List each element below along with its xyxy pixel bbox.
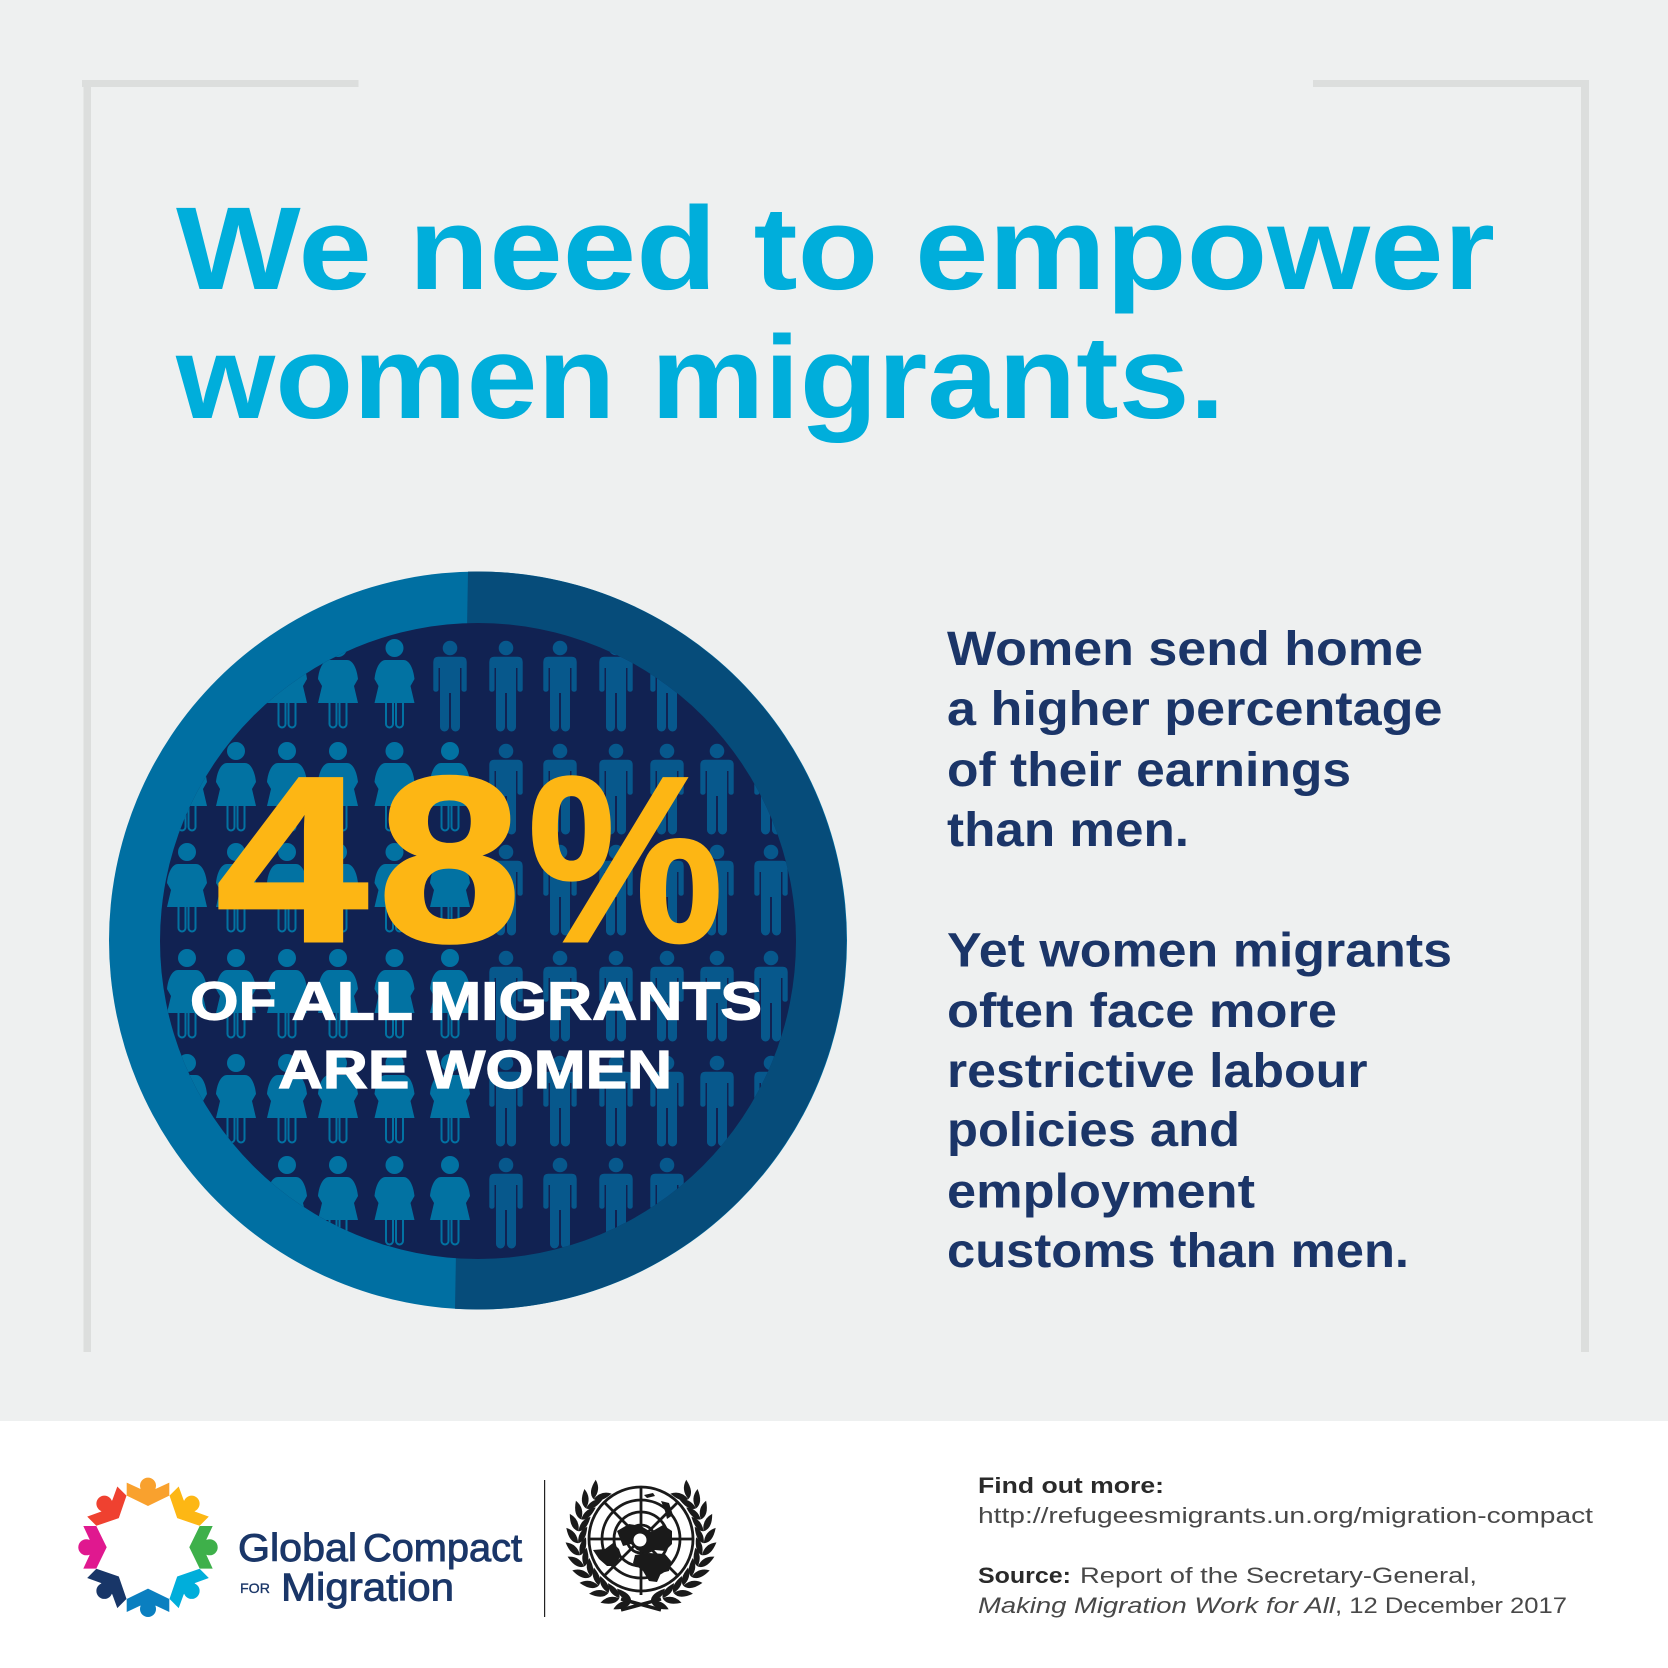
footer text: source	[978, 1563, 1567, 1618]
text block: remittances: of their earnings	[947, 744, 1351, 797]
footer text: source: , 12 December 2017	[1335, 1593, 1567, 1618]
title	[175, 183, 1495, 444]
stat caption	[190, 972, 762, 1100]
logo wordmark: Migration	[281, 1566, 454, 1610]
title: We need to empower	[176, 183, 1495, 315]
big number: %	[528, 728, 723, 992]
icon: United Nations emblem	[566, 1480, 716, 1612]
text block: restrictions	[947, 924, 1452, 1278]
text block: remittances: a higher percentage	[947, 683, 1442, 736]
text block: remittances	[947, 623, 1442, 857]
text block: restrictions: often face more	[947, 985, 1337, 1038]
logo: Global Compact ring of people	[78, 1478, 218, 1617]
logo wordmark: FOR	[240, 1580, 270, 1596]
big number: 4	[216, 728, 368, 992]
big number: 8	[378, 728, 521, 992]
ring: women share	[109, 572, 847, 1310]
footer text: source: Report of the Secretary-General,	[1080, 1563, 1477, 1588]
title: women migrants.	[175, 312, 1225, 444]
inner disc	[160, 623, 796, 1259]
logo wordmark: Compact	[363, 1527, 522, 1570]
logo wordmark: Global	[238, 1527, 357, 1570]
logo divider	[544, 1480, 545, 1617]
stat caption: OF ALL MIGRANTS	[190, 972, 762, 1032]
text block: restrictions: policies and	[947, 1104, 1240, 1157]
stat caption: ARE WOMEN	[278, 1040, 672, 1100]
footer band	[0, 1421, 1668, 1668]
text block: restrictions: employment	[947, 1166, 1255, 1218]
footer text: find out more: http://refugeesmigrants.un.org/migration-compact	[978, 1503, 1594, 1528]
text block: remittances: Women send home	[947, 623, 1423, 676]
corner frame	[82, 80, 1589, 1352]
footer text: find out more: Find out more:	[978, 1473, 1164, 1498]
people pictogram	[167, 639, 788, 1248]
text block: remittances: than men.	[947, 804, 1189, 857]
text block: restrictions: Yet women migrants	[947, 924, 1452, 978]
ring: men share	[455, 571, 846, 1309]
footer text: source: Making Migration Work for All	[978, 1593, 1336, 1618]
footer text: find out more	[978, 1473, 1594, 1528]
text block: restrictions: restrictive labour	[947, 1045, 1368, 1098]
donut chart: 48% of all migrants are women	[109, 571, 847, 1310]
footer text: source: Source:	[978, 1563, 1071, 1588]
logo wordmark	[238, 1527, 522, 1610]
text block: restrictions: customs than men.	[947, 1225, 1409, 1278]
big number	[216, 728, 723, 992]
